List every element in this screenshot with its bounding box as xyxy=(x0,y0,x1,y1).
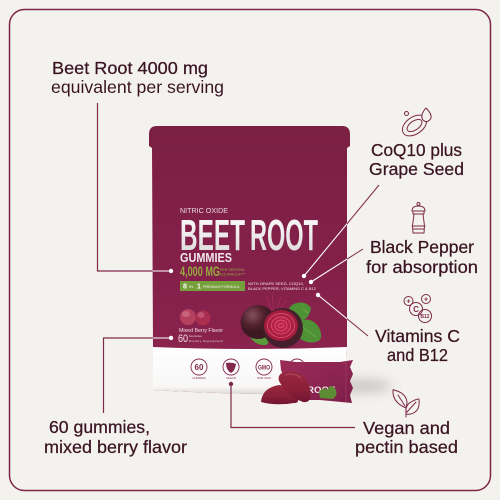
cut beet xyxy=(263,308,303,348)
callout: vegan: Vegan and xyxy=(363,418,450,438)
product name: ROOT xyxy=(250,211,318,260)
callout: coq10 xyxy=(369,140,464,179)
product type: GUMMIES xyxy=(180,250,232,265)
icon: vitamins: B12 xyxy=(420,314,430,320)
callout: gummies: mixed berry flavor xyxy=(44,437,187,457)
icon: leaves xyxy=(393,390,419,417)
candy wrapper: ROOT xyxy=(307,385,335,396)
formula banner: IN xyxy=(189,284,193,289)
leader: beet root dose xyxy=(98,103,171,271)
pouch white base xyxy=(153,347,347,394)
badges: 60 xyxy=(195,363,204,372)
icon: vitamins: + xyxy=(406,298,411,306)
callout: vitamins xyxy=(375,326,460,365)
formula banner: 1 xyxy=(197,284,201,290)
callout: beet root: Beet Root 4000 mg xyxy=(52,58,208,78)
badges: NON-GMO xyxy=(257,376,272,380)
product pouch xyxy=(149,126,350,394)
callout: beet root: equivalent per serving xyxy=(51,77,224,97)
badges: GUMMIES xyxy=(192,376,206,380)
callout: gummies: 60 gummies, xyxy=(49,417,150,437)
dosage note: EQUIVALENT** xyxy=(220,272,246,276)
gummy pieces xyxy=(261,371,310,404)
icon: pepper mill xyxy=(412,202,425,233)
formula banner: PREMIUM FORMULA xyxy=(203,285,240,289)
formula banner: 8 xyxy=(183,284,187,290)
dosage note xyxy=(220,268,246,276)
badges xyxy=(191,359,305,380)
leader: coq10 xyxy=(304,185,379,276)
badges: GMO xyxy=(258,366,270,372)
callout: black pepper: for absorption xyxy=(366,257,478,277)
icon: grape and drop xyxy=(399,108,431,140)
callout: vegan xyxy=(355,418,458,457)
ingredients text: WITH GRAPE SEED, COQ10, xyxy=(248,282,304,286)
callout: black pepper: Black Pepper xyxy=(370,237,474,257)
leader: vegan xyxy=(231,384,355,428)
icon: vitamins: C xyxy=(413,305,419,314)
callout: black pepper xyxy=(366,237,478,277)
product name: BEET xyxy=(180,211,245,260)
flavor label: Mixed Berry Flavor xyxy=(179,328,223,334)
ingredients text xyxy=(248,282,316,291)
formula banner xyxy=(180,281,245,291)
dosage note: PER SERVING xyxy=(220,268,245,272)
callout: vitamins: and B12 xyxy=(387,345,448,365)
dots xyxy=(169,269,320,386)
leader: black pepper xyxy=(311,249,363,282)
count note: Gummies xyxy=(189,334,202,338)
leader: count xyxy=(104,338,171,413)
candy shadow xyxy=(332,381,392,391)
candy wrapper xyxy=(280,360,353,403)
callout: beet root xyxy=(51,58,224,97)
icon: vitamins: + xyxy=(424,296,428,304)
callout: vitamins: Vitamins C xyxy=(375,326,460,346)
callout: vegan: pectin based xyxy=(355,437,458,457)
callout: coq10: Grape Seed xyxy=(369,159,464,179)
callout: coq10: CoQ10 plus xyxy=(371,140,462,160)
pouch body xyxy=(149,126,350,394)
count: 60 xyxy=(178,333,188,345)
leader lines xyxy=(98,103,379,428)
stems xyxy=(266,294,286,313)
leaves xyxy=(287,303,321,342)
count note: Dietary Supplement xyxy=(189,339,223,343)
beet illustration xyxy=(240,294,321,348)
dosage: 4,000 MG xyxy=(180,263,220,279)
product subtitle: NITRIC OXIDE xyxy=(180,206,228,215)
gummies illustration xyxy=(180,309,210,326)
leader: vitamins xyxy=(318,295,368,336)
white overlay on pouch xyxy=(152,223,347,338)
icon: vitamins xyxy=(404,294,432,322)
ingredients text: BLACK PEPPER, VITAMINS C & B12 xyxy=(248,287,316,291)
count note xyxy=(189,334,223,343)
whole beet xyxy=(240,305,276,339)
callout: gummies xyxy=(44,417,187,457)
badges: VEGAN xyxy=(226,376,236,380)
